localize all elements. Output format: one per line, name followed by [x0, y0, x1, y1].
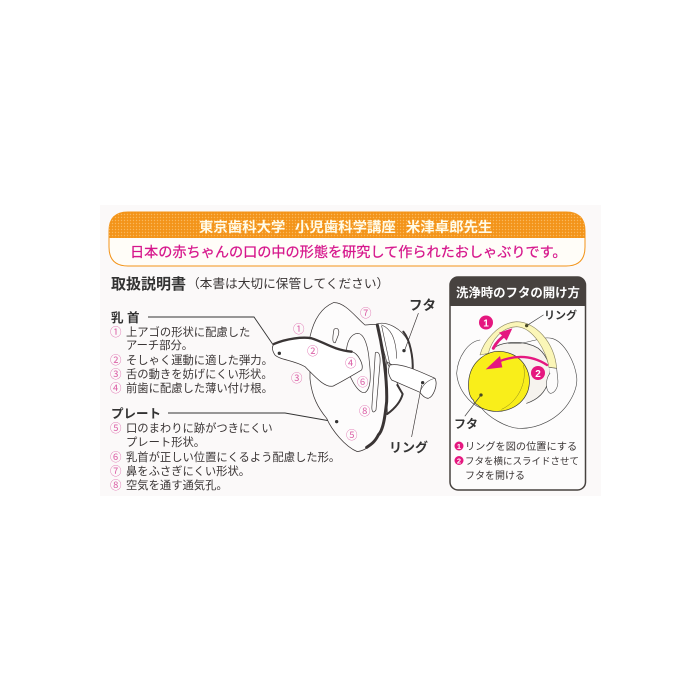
text block: nipple: ②: [110, 354, 122, 367]
steps text: リングを図の位置にする: [465, 440, 577, 453]
text block: plate: プレート形状。: [126, 435, 205, 449]
text block: nipple: ④: [110, 382, 122, 395]
text block: nipple: 乳 首: [111, 310, 139, 325]
text block: plate: ⑥: [110, 451, 122, 464]
diagram number labels: [291, 307, 372, 442]
cap opening diagram: [457, 315, 577, 428]
diagram number labels: ①: [293, 323, 305, 336]
ring handle: [388, 365, 436, 398]
text block: plate: [110, 407, 340, 492]
ring: [480, 322, 557, 368]
text block: plate: 鼻をふさぎにくい形状。: [126, 464, 250, 478]
diagram number labels: ⑤: [346, 429, 358, 442]
diagram number labels: ③: [291, 372, 303, 385]
diagram number labels: ④: [345, 357, 357, 370]
text block: nipple: 上アゴの形状に配慮した: [126, 325, 250, 339]
banner title: 小児歯科学講座: [295, 218, 396, 236]
vent holes: [333, 328, 339, 343]
text block: nipple: ①: [110, 326, 122, 339]
banner title: 米津卓郎先生: [406, 218, 492, 236]
text block: nipple: 前歯に配慮した薄い付け根。: [126, 381, 273, 395]
text block: plate: ⑦: [110, 465, 122, 478]
steps text: フタを開ける: [465, 470, 525, 482]
arrow 1: [493, 335, 506, 348]
yellow cap: [469, 351, 529, 411]
lower cap behind plate: [387, 362, 403, 414]
plate: [310, 303, 387, 452]
panel heading text: 洗浄時のフタの開け方: [456, 285, 580, 300]
text block: nipple: 舌の動きを妨げにくい形状。: [126, 367, 273, 381]
steps text: [454, 440, 579, 482]
steps text: フタを横にスライドさせて: [465, 456, 579, 468]
text block: nipple: [110, 310, 276, 395]
inner circle: [346, 333, 370, 393]
diagram number labels: ⑥: [357, 376, 369, 389]
panel header: [450, 277, 586, 306]
step badge 2: 2: [535, 369, 541, 380]
heading: instruction manual: 取扱説明書: [111, 275, 186, 293]
thick plate edge: [367, 325, 387, 447]
text block: plate: ⑧: [110, 479, 122, 492]
label: cap: フタ: [454, 417, 478, 431]
ring lug: [546, 367, 558, 393]
leader lines: [405, 313, 422, 437]
label: ring: リング: [544, 308, 577, 322]
step badge 1: [479, 316, 493, 330]
panel: card background: [100, 205, 601, 496]
cap behind plate: [377, 323, 413, 371]
base disc: [493, 342, 550, 403]
pacifier diagram: [272, 303, 436, 452]
marker dots and leaders: [479, 393, 483, 397]
diagram number labels: ⑧: [359, 405, 371, 418]
panel: how to open the cap: [450, 277, 586, 490]
banner subtitle: 日本の赤ちゃんの口の中の形態を研究して作られたおしゃぶりです。: [130, 244, 567, 260]
text block: nipple: ③: [110, 368, 122, 381]
heading: instruction manual: （本書は大切に保管してください）: [187, 277, 389, 291]
arrow 2: [498, 357, 547, 365]
plate outline: [457, 338, 577, 428]
diagram number labels: ⑦: [360, 307, 372, 320]
text block: plate: 乳首が正しい位置にくるよう配慮した形。: [126, 450, 340, 464]
nipple: [272, 338, 362, 386]
text block: plate: 空気を通す通気孔。: [126, 478, 228, 492]
text block: plate: ⑤: [110, 422, 122, 435]
marker dots: [278, 349, 424, 423]
steps text: 1: [457, 442, 461, 451]
banner: [109, 212, 585, 266]
inner cap arc: [502, 365, 524, 409]
diagram number labels: ②: [307, 345, 319, 358]
text block: plate: プレート: [111, 407, 161, 421]
steps text: 2: [457, 456, 461, 466]
step badge 1: 1: [483, 318, 489, 330]
text block: nipple: そしゃく運動に適した弾力。: [126, 353, 273, 367]
text block: plate: 口のまわりに跡がつきにくい: [126, 421, 273, 435]
banner title: 東京歯科大学: [199, 218, 285, 236]
text block: nipple: アーチ部分。: [126, 339, 193, 352]
step badge 2: [531, 366, 545, 380]
heading: instruction manual: [111, 275, 389, 293]
label: cap: フタ: [409, 298, 436, 313]
label: ring: リング: [389, 440, 428, 455]
